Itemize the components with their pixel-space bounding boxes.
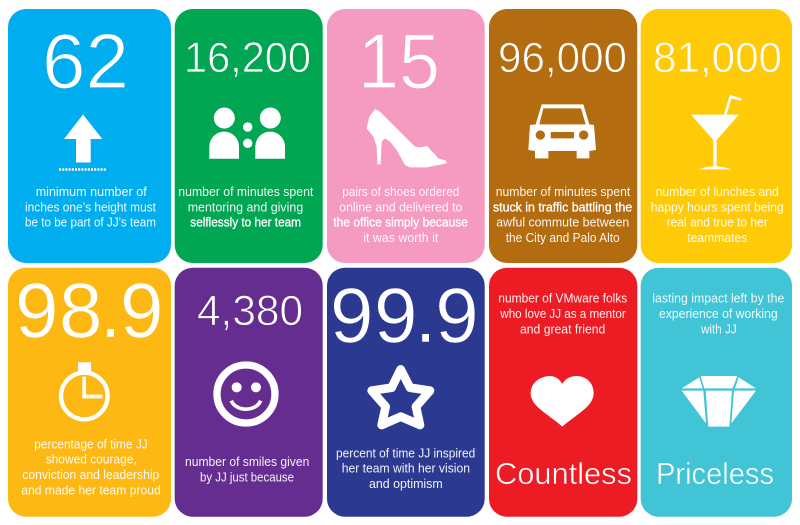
word: Priceless: Priceless bbox=[656, 456, 774, 491]
icon: martini glass bbox=[691, 97, 741, 169]
description bbox=[21, 436, 161, 497]
word: Countless: Countless bbox=[495, 456, 632, 491]
number: 16,200: 16,200 bbox=[184, 34, 311, 82]
description: teammates bbox=[687, 230, 748, 245]
number: 99.9: 99.9 bbox=[330, 271, 479, 359]
icon: star bbox=[372, 369, 430, 425]
description bbox=[178, 184, 314, 230]
icon: car bbox=[528, 104, 596, 158]
description: stuck in traffic battling the bbox=[493, 199, 632, 214]
description: by JJ just because bbox=[200, 469, 294, 484]
description: conviction and leadership bbox=[22, 467, 159, 482]
panel: countless VMware folks bbox=[489, 268, 637, 517]
panel: 4,380 smiles bbox=[175, 268, 323, 517]
icon: up arrow bbox=[59, 114, 107, 170]
description: number of lunches and bbox=[656, 184, 779, 199]
description: the office simply because bbox=[333, 215, 468, 230]
number: 96,000: 96,000 bbox=[498, 34, 627, 82]
icon: diamond bbox=[682, 376, 756, 427]
description bbox=[336, 445, 475, 491]
description: experience of working bbox=[659, 306, 778, 321]
description bbox=[651, 184, 784, 245]
description: and made her team proud bbox=[21, 482, 161, 497]
description: the City and Palo Alto bbox=[506, 230, 620, 245]
description: number of minutes spent bbox=[178, 184, 314, 199]
description: online and delivered to bbox=[339, 199, 462, 214]
description: minimum number of bbox=[36, 184, 147, 199]
description: percentage of time JJ bbox=[34, 436, 148, 451]
description: happy hours spent being bbox=[651, 199, 784, 214]
description bbox=[498, 291, 628, 336]
description: number of minutes spent bbox=[496, 184, 631, 199]
description bbox=[493, 184, 632, 245]
description: inches one’s height must bbox=[25, 199, 156, 214]
description: real and true to her bbox=[667, 215, 768, 230]
description: selflessly to her team bbox=[190, 215, 301, 230]
icon: two people bbox=[209, 108, 285, 159]
panel: 81,000 lunches bbox=[641, 9, 792, 263]
description: be to be part of JJ’s team bbox=[25, 215, 156, 230]
description bbox=[185, 454, 309, 484]
description: number of smiles given bbox=[185, 454, 309, 469]
description: with JJ bbox=[700, 321, 737, 336]
panel: 96,000 minutes in traffic bbox=[489, 9, 637, 263]
description: number of VMware folks bbox=[498, 291, 628, 306]
description: her team with her vision bbox=[342, 461, 470, 476]
description: and great friend bbox=[520, 321, 605, 336]
description bbox=[652, 291, 784, 336]
icon: heart bbox=[531, 376, 594, 427]
panel: 98.9 percent courage bbox=[8, 266, 171, 517]
number: 15: 15 bbox=[358, 17, 440, 105]
panel: 99.9 percent inspired bbox=[327, 268, 485, 517]
number: 4,380: 4,380 bbox=[197, 287, 303, 335]
number: 98.9: 98.9 bbox=[15, 266, 163, 354]
description: who love JJ as a mentor bbox=[499, 306, 626, 321]
description: pairs of shoes ordered bbox=[342, 184, 459, 199]
panel: 16,200 minutes mentoring bbox=[175, 9, 323, 263]
icon: stopwatch bbox=[61, 362, 108, 419]
icon: smiley face bbox=[217, 365, 275, 423]
panel: 15 pairs of shoes bbox=[327, 9, 485, 263]
icon: high heel shoe bbox=[367, 109, 447, 167]
panel: priceless impact bbox=[641, 268, 792, 517]
description bbox=[333, 184, 468, 245]
description: percent of time JJ inspired bbox=[336, 445, 475, 460]
number: 81,000: 81,000 bbox=[653, 34, 782, 82]
description bbox=[25, 184, 156, 230]
description: showed courage, bbox=[46, 452, 137, 467]
description: lasting impact left by the bbox=[652, 291, 784, 306]
number: 62: 62 bbox=[42, 17, 129, 105]
description: awful commute between bbox=[496, 215, 629, 230]
description: mentoring and giving bbox=[188, 199, 303, 214]
description: it was worth it bbox=[363, 230, 439, 245]
description: and optimism bbox=[369, 476, 443, 491]
panel: 62 inches bbox=[8, 9, 171, 263]
